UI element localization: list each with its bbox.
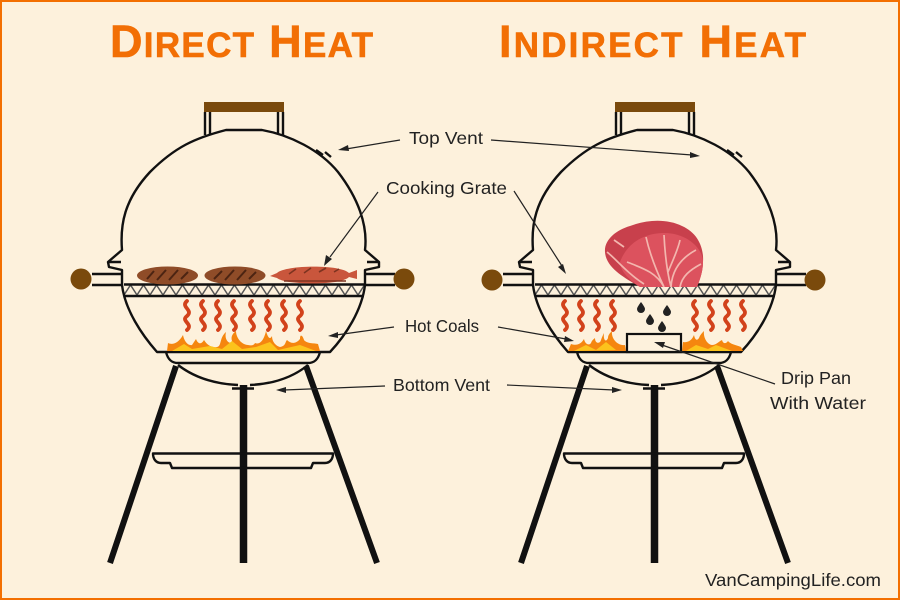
arrow: cooking grate right [514,191,566,274]
arrow: top vent left [338,140,400,151]
drip pan [627,334,681,352]
meat roast [605,221,703,287]
grill: indirect heat [482,102,826,563]
lower shelf [153,454,333,468]
ash catcher [166,352,320,363]
heat waves left [563,301,615,330]
side handles [70,262,414,290]
cooking grate [124,284,364,296]
sausage [270,267,357,284]
heat waves right [693,301,745,330]
arrow: drip pan [654,342,775,384]
grill handle [204,102,284,135]
top vent [727,150,742,157]
grill bowl [122,285,365,352]
label: drip pan with water: Drip Pan [781,368,851,388]
grill handle [615,102,695,135]
top vent [316,150,331,157]
heat waves [185,301,302,330]
title: direct heat: DIRECT HEAT [110,16,373,67]
label: cooking grate: Cooking Grate [386,178,507,198]
label: top vent: Top Vent [409,128,483,148]
flames left [568,331,626,351]
ash catcher [577,352,731,363]
bottom bowl [178,365,308,385]
arrow: hot coals right [498,327,574,342]
bottom bowl [589,365,719,385]
label: hot coals: Hot Coals [405,316,479,336]
arrow: top vent right [491,140,700,158]
grill bowl [533,285,776,352]
arrow: bottom vent right [507,385,622,393]
grill: direct heat [70,102,414,563]
lower shelf [564,454,744,468]
cooking grate [535,284,775,296]
bottom vent [643,387,665,390]
arrow: hot coals left [328,327,394,338]
arrow: bottom vent left [276,386,385,393]
arrow: cooking grate left [324,192,378,266]
grill dome [519,130,790,285]
bottom vent [232,387,254,390]
label: bottom vent: Bottom Vent [393,375,490,395]
legs [110,366,377,563]
water drops [637,302,671,332]
burger 2 [204,266,266,284]
label: drip pan with water: With Water [770,393,866,413]
side handles [482,262,826,290]
grill dome [108,130,379,285]
flames [167,331,320,351]
legs [521,366,788,563]
burger 1 [137,266,198,284]
flames right [682,331,743,351]
website credit: VanCampingLife.com [705,570,881,590]
title: indirect heat: INDIRECT HEAT [499,16,806,67]
